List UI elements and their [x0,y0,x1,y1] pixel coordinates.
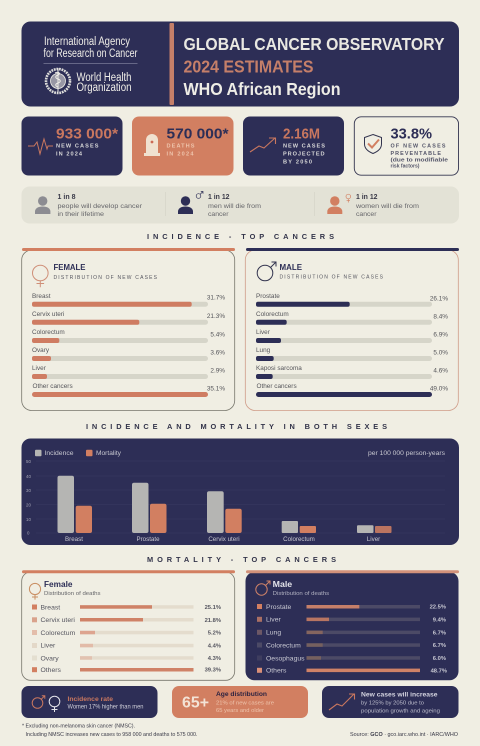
panel: female mortality: Female [44,580,73,589]
panel: male incidence: DISTRIBUTION OF NEW CASES [280,274,384,280]
panel: female mortality [22,570,235,680]
stat card: deaths: 570 000* [166,126,229,142]
chart: female incidence bars: 2.9% [210,368,225,374]
icon: person navy [178,196,193,214]
chart: male incidence bars: 5.0% [433,350,448,356]
icon: male symbol small [196,192,203,198]
info strip: lifetime risk: 1 in 12 [356,194,378,201]
icon: male and female symbols [32,696,60,712]
chart: female incidence bars: 21.3% [207,313,225,320]
chart: male incidence bars: Kaposi sarcoma [256,365,302,372]
icon: rising arrow [250,138,276,152]
chart: male incidence bars: Colorectum [256,311,289,318]
stat card: preventable: PREVENTABLE [390,151,441,157]
panel: female incidence: DISTRIBUTION OF NEW CASES [54,275,158,281]
icon: shield check [364,134,382,154]
chart: female incidence bars: Liver [32,365,47,372]
stat card: projected: NEW CASES [283,144,325,150]
chart: male incidence bars: 4.6% [433,368,448,374]
x axis labels: Prostate [136,536,160,543]
chart: male mortality rows: 6.7% [433,630,446,636]
chart: male mortality rows [257,604,447,675]
source line: Source: GCO · gco.iarc.who.int · IARC/WHO [350,732,458,738]
chart: male incidence bars: Prostate [256,293,280,300]
panel: female mortality: Distribution of deaths [44,591,101,597]
chart: male incidence bars: Lung [256,347,271,354]
info strip: lifetime risk: cancer [208,211,229,218]
y axis labels: 40 [26,474,31,479]
callout: age distribution: 21% of new cases are [216,700,274,706]
heading: incidence and mortality: INCIDENCE AND MORTALITY IN BOTH SEXES [86,422,387,431]
legend [35,450,445,457]
icon: person coral [327,196,342,214]
heading: mortality top cancers: MORTALITY - TOP CANCERS [147,555,336,564]
chart: female mortality rows [32,604,221,674]
chart: male mortality rows: Oesophagus [266,655,305,662]
stat card: preventable: OF NEW CASES [390,144,446,150]
legend: per 100 000 person-years [368,450,445,457]
x axis labels: Liver [367,536,380,543]
callout: age distribution: 65+ [182,694,209,712]
callout: incidence rate: Women 17% higher than men [68,704,144,710]
chart: female incidence bars: Other cancers [32,383,73,390]
callout: incidence rate [22,686,158,718]
header banner [22,22,459,106]
panel: female incidence [22,248,235,410]
chart: male incidence bars: Liver [256,329,271,336]
stat card: deaths: DEATHS [166,144,195,150]
panel: male mortality: Distribution of deaths [273,591,329,597]
y axis labels: 30 [26,488,31,493]
panel: male mortality: Male [273,580,293,589]
stat card: new cases: NEW CASES [56,144,99,150]
title: 2024 ESTIMATES [184,56,314,76]
chart: female mortality rows: Others [40,667,61,674]
chart: female incidence bars: Ovary [32,347,50,354]
chart: female incidence bars: 3.6% [210,350,225,356]
chart: male incidence bars [256,293,448,397]
chart: female mortality rows: 25.1% [205,605,221,611]
chart: male mortality rows: Prostate [266,604,292,611]
x axis labels: Cervix uteri [208,536,240,543]
IARC logo text: International Agency [44,36,130,48]
stat card: preventable: (due to modifiable [390,158,448,164]
icon: tombstone [144,134,160,156]
icon: female symbol [32,265,48,287]
callout: age distribution: 65 years and older [216,708,264,714]
stat card: new cases: 933 000* [56,126,118,142]
callout: new cases will increase: by 125% by 2050 due to [361,700,425,706]
icon: male symbol [257,262,276,281]
IARC logo text: for Research on Cancer [44,48,138,60]
icon: female symbol [29,583,41,600]
WHO logo text: World Health [76,72,132,84]
stat card: new cases: IN 2024 [56,152,83,158]
chart: male mortality rows: Others [266,668,287,675]
footnote: * Excluding non-melanoma skin cancer (NMSC). [22,724,135,730]
chart: male incidence bars: 8.4% [433,314,448,320]
x axis labels [65,536,380,543]
info strip: lifetime risk [22,186,459,224]
chart: female mortality rows: Colorectum [40,630,76,637]
panel: male incidence [245,248,459,410]
y axis labels: 10 [26,517,31,522]
chart: female mortality rows: Cervix uteri [40,617,75,624]
icon: rising arrow [329,694,354,710]
y axis labels: 0 [27,530,30,536]
callout: age distribution: Age distribution [216,691,267,698]
panel: male mortality [246,570,459,680]
icon: heartbeat [28,139,53,154]
icon: person grey [35,196,50,214]
footnote [22,724,197,738]
y axis labels: 50 [26,459,31,464]
chart: male incidence bars: 49.0% [430,386,448,392]
panel: male incidence: MALE [280,263,303,272]
callout: incidence rate: Incidence rate [68,696,113,703]
chart: female incidence bars: 35.1% [207,386,225,392]
chart: male incidence bars: Other cancers [256,383,297,390]
info strip: lifetime risk: women will die from [355,203,420,210]
chart: male mortality rows: 48.7% [431,668,447,674]
chart: male mortality rows: 9.4% [433,617,446,623]
stat card: new cases [22,116,122,176]
stat card: preventable: risk factors) [390,164,420,170]
chart: female incidence bars: 31.7% [207,294,225,302]
chart: female incidence bars: Breast [32,293,51,300]
title [184,34,445,99]
callout: new cases will increase: population growth and ageing [361,708,440,714]
bars [58,476,374,533]
info strip: lifetime risk: 1 in 12 [208,194,230,201]
chart: female mortality rows: 39.3% [205,668,221,674]
x axis labels: Breast [65,536,83,543]
chart: female mortality rows: 21.8% [205,618,221,624]
chart: male incidence bars: 6.9% [433,332,448,338]
chart: female mortality rows: 4.3% [208,656,221,662]
title: WHO African Region [184,79,340,99]
chart: male mortality rows: Colorectum [266,642,301,649]
chart: female mortality rows: Ovary [40,655,59,662]
stat card: projected: BY 2050 [283,160,312,166]
footnote: Including NMSC increases new cases to 958 000 and deaths to 575 000. [26,732,197,738]
callout: new cases will increase: New cases will increase [361,692,438,698]
chart: male mortality rows: 22.5% [430,605,446,611]
icon: male symbol [256,581,270,595]
stat card: preventable: 33.8% [390,126,432,142]
chart: male mortality rows: 6.7% [433,643,446,649]
chart: female incidence bars [32,293,225,397]
chart: female mortality rows: Liver [40,643,56,650]
stat card: projected: PROJECTED [283,152,324,158]
icon: WHO emblem [46,68,70,93]
legend: Mortality [96,450,122,457]
IARC logo text [44,36,138,64]
info strip: lifetime risk: men will die from [208,203,262,210]
callout: new cases will increase [322,686,458,718]
stat card: projected: 2.16M [283,126,320,142]
heading: incidence top cancers: INCIDENCE - TOP CANCERS [147,232,334,241]
x axis labels: Colorectum [283,536,315,543]
chart: female mortality rows: 5.2% [208,630,221,636]
stat card: preventable [354,117,458,175]
chart: female mortality rows: 4.4% [208,643,221,649]
stat card: deaths: IN 2024 [166,152,194,158]
info strip: lifetime risk: in their lifetime [58,211,104,218]
chart: female incidence bars: Colorectum [32,329,65,336]
panel: female incidence: FEMALE [54,263,86,272]
chart: male mortality rows: Lung [266,630,281,637]
chart: female incidence bars: Cervix uteri [32,311,64,318]
chart: male mortality rows: 6.0% [433,656,446,662]
info strip: lifetime risk: 1 in 8 [58,194,76,201]
title: GLOBAL CANCER OBSERVATORY [184,34,445,54]
stat card: deaths [132,116,234,176]
panel: bar chart incidence and mortality [22,438,459,545]
WHO logo text: Organization [76,82,132,94]
icon: female symbol small [346,194,351,202]
stat card: projected [243,116,344,176]
chart: female incidence bars: 5.4% [210,332,225,338]
chart: male incidence bars: 26.1% [430,296,448,302]
info strip: lifetime risk: cancer [356,211,377,218]
WHO logo text [76,72,132,94]
legend: Incidence [44,450,74,457]
callout: age distribution [172,686,308,718]
y axis labels [26,459,31,536]
y axis labels: 20 [26,502,31,508]
chart: female mortality rows: Breast [40,604,60,611]
info strip: lifetime risk: people will develop cancer [58,203,143,210]
chart: male mortality rows: Liver [266,617,281,624]
